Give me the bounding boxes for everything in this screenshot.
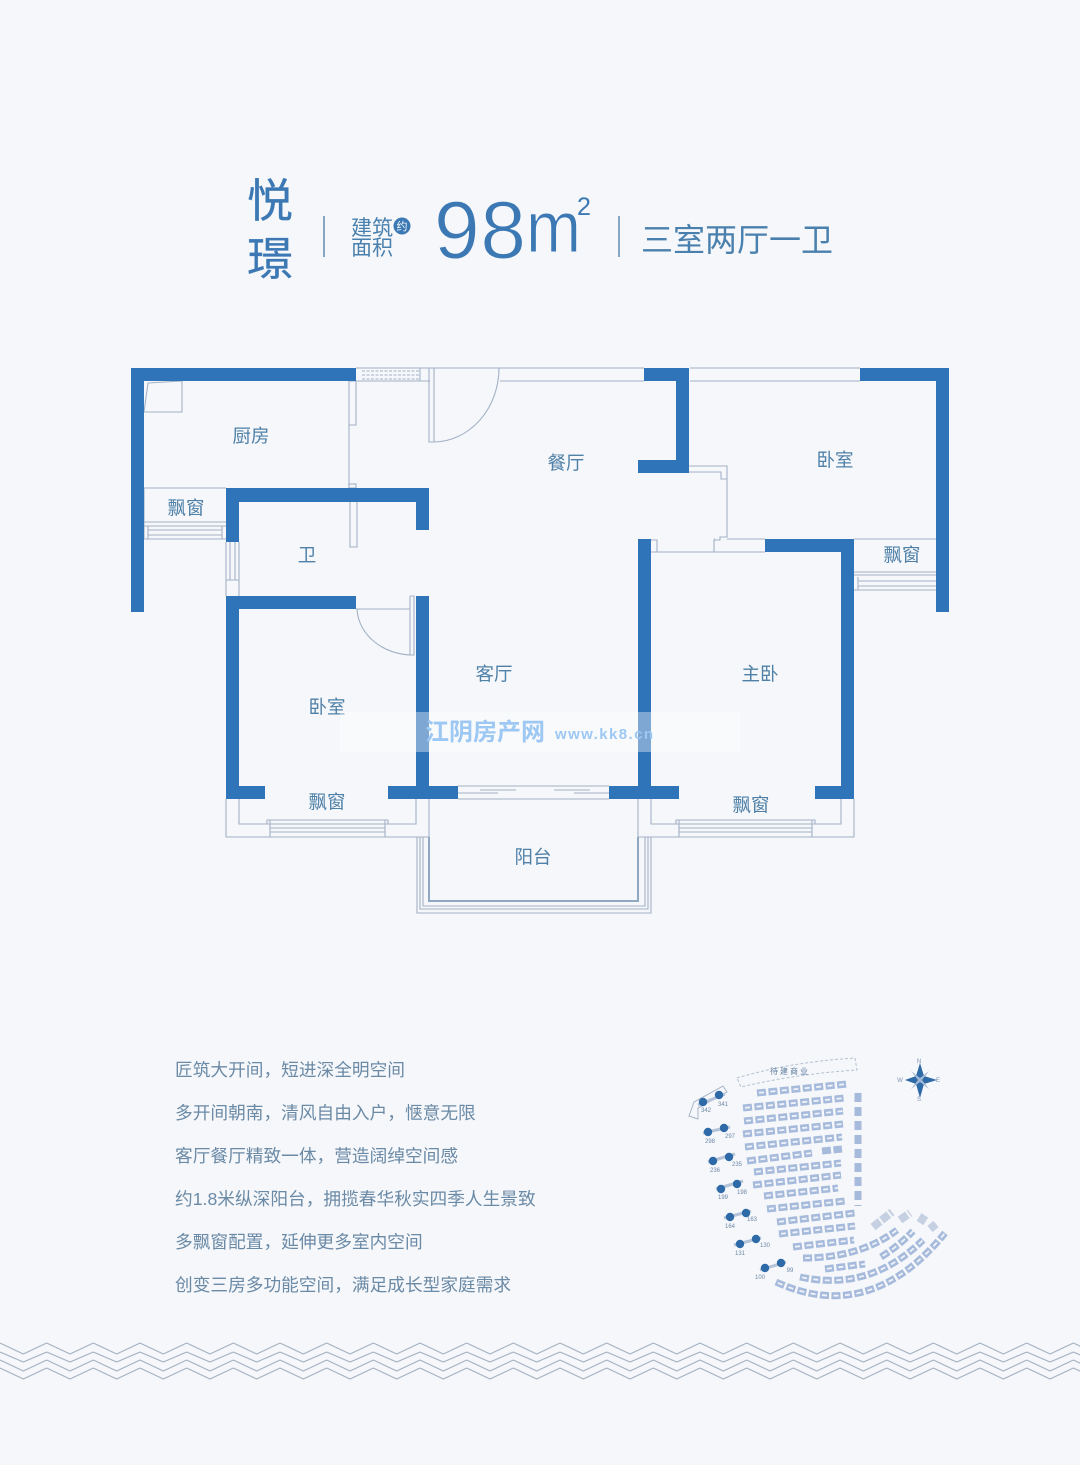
feature list: 匠筑大开间，短进深全明空间 (175, 1060, 405, 1080)
unit numbers (701, 1102, 794, 1281)
label: building area: 面积 (351, 237, 393, 260)
label: building area: 建筑 (351, 217, 393, 240)
title: project name: 悦 (247, 175, 293, 227)
unit numbers: 342 (701, 1108, 712, 1114)
divider: right (618, 216, 620, 257)
icon: compass: N (917, 1059, 921, 1065)
header: title and specifications (247, 175, 833, 285)
feature list: 约1.8米纵深阳台，拥揽春华秋实四季人生景致 (175, 1189, 536, 1209)
area number: 98 square metres (434, 185, 591, 276)
lighter blocks (873, 1212, 936, 1229)
icon: compass: E (936, 1078, 940, 1084)
thin lines: windows, doors and bays (144, 368, 936, 913)
unit numbers: 164 (725, 1224, 736, 1230)
future commercial area (737, 1058, 857, 1087)
unit numbers: 235 (732, 1162, 743, 1168)
unit numbers: 131 (735, 1251, 746, 1257)
unit numbers: 297 (725, 1134, 736, 1140)
title: project name: 璟 (247, 233, 293, 285)
icon: compass: S (917, 1097, 921, 1103)
wave band (0, 1340, 1080, 1382)
feature list: 多开间朝南，清风自由入户，惬意无限 (175, 1103, 476, 1123)
icon: compass (897, 1059, 940, 1103)
residential blocks (743, 1084, 945, 1296)
corner building outline (689, 1086, 727, 1119)
room labels: 厨房 (232, 426, 270, 446)
badge: approximately: 约 (396, 220, 408, 233)
badge: approximately (394, 218, 410, 234)
room labels: 飘窗 (883, 544, 921, 566)
room labels: 主卧 (741, 664, 779, 684)
room labels: 阳台 (514, 846, 552, 868)
unit numbers: 100 (755, 1275, 766, 1281)
unit numbers: 163 (747, 1217, 758, 1223)
room labels: 卧室 (308, 696, 346, 718)
watermark (340, 712, 740, 752)
label: building area (351, 217, 393, 260)
room labels: 卧室 (816, 450, 854, 470)
watermark: www.kk8.cn (554, 726, 653, 743)
area number: 98 square metres: m (526, 188, 581, 268)
block highlights (743, 1084, 945, 1296)
unit numbers: 99 (787, 1268, 794, 1274)
room labels: 飘窗 (167, 498, 205, 518)
highlighted units (698, 1094, 786, 1270)
title: project name (247, 175, 293, 285)
area number: 98 square metres: 2 (577, 193, 591, 221)
divider: left (323, 216, 325, 257)
unit numbers: 199 (718, 1195, 729, 1201)
room labels: 客厅 (475, 664, 513, 684)
watermark: 江阴房产网 (425, 719, 545, 746)
icon: compass: W (897, 1078, 903, 1084)
feature list: 多飘窗配置，延伸更多室内空间 (175, 1232, 423, 1252)
feature list: 创变三房多功能空间，满足成长型家庭需求 (175, 1275, 511, 1295)
future commercial area: 待建商业 (770, 1066, 808, 1076)
site plan (689, 1058, 945, 1296)
room labels: 飘窗 (308, 792, 346, 812)
feature list: 客厅餐厅精致一体，营造阔绰空间感 (175, 1146, 458, 1166)
room labels (167, 426, 921, 868)
unit numbers: 298 (705, 1139, 716, 1145)
room labels: 餐厅 (547, 452, 585, 474)
room labels: 飘窗 (732, 794, 770, 816)
area number: 98 square metres: 98 (434, 185, 526, 276)
floor plan (131, 368, 949, 913)
room labels: 卫 (298, 544, 316, 566)
layout: three bedrooms two halls one bath: 三室两厅一卫 (641, 222, 833, 258)
unit numbers: 341 (718, 1102, 729, 1108)
unit numbers: 198 (737, 1190, 748, 1196)
unit numbers: 236 (710, 1168, 721, 1174)
unit numbers: 130 (760, 1243, 771, 1249)
walls (131, 368, 949, 799)
feature list (175, 1060, 536, 1295)
